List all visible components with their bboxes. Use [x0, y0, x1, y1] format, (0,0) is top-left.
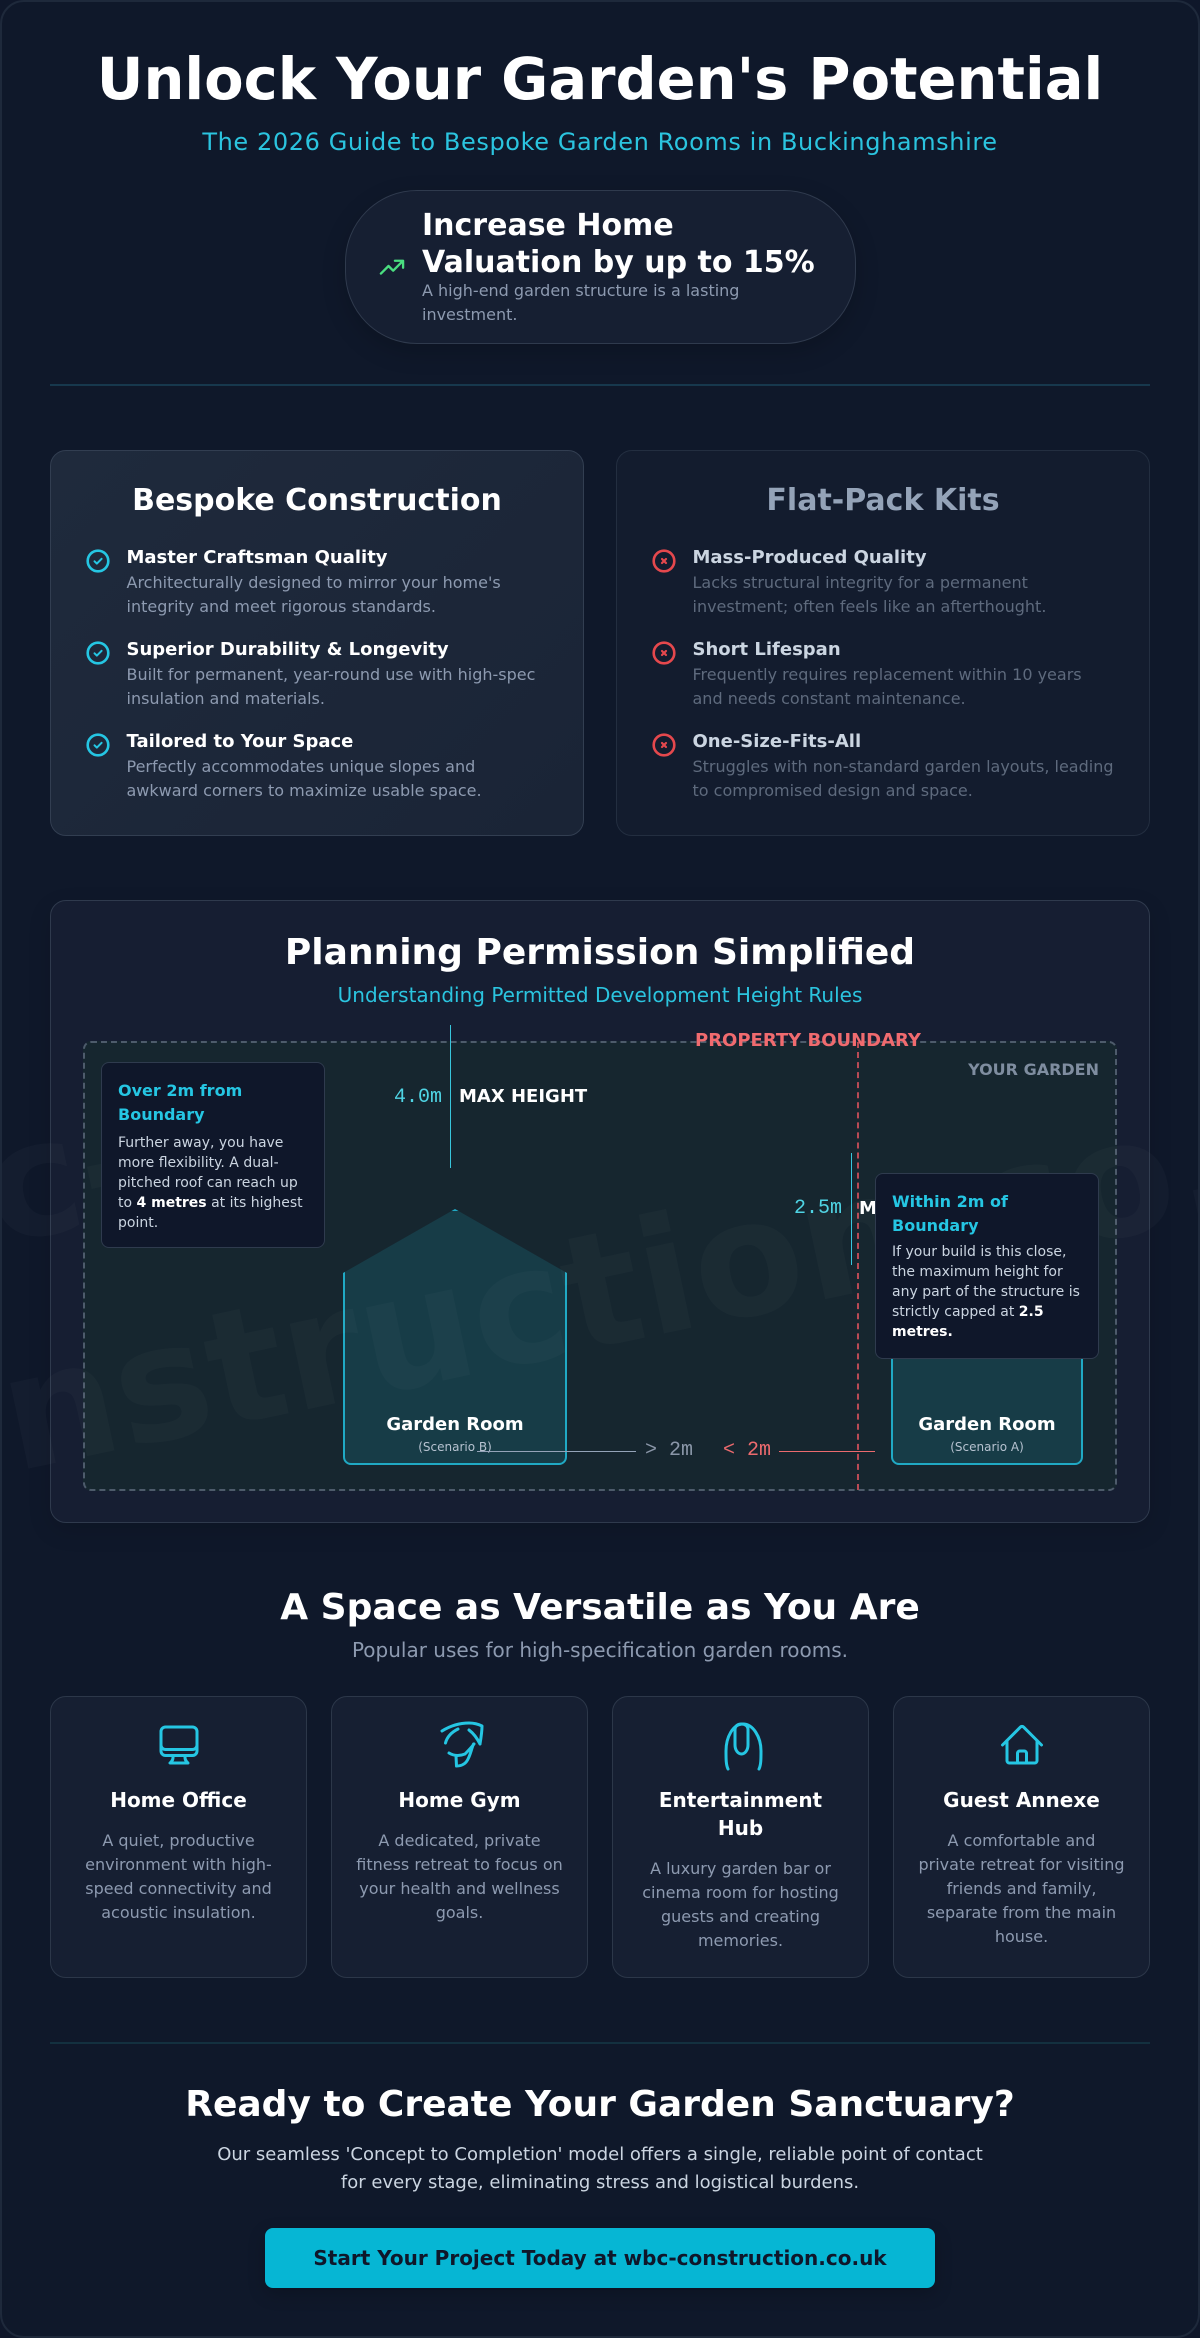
- list item: tailored: awkward corners to maximize usable space.: [126, 781, 482, 800]
- info heading: [118, 1081, 242, 1124]
- card text: [642, 1859, 839, 1950]
- room name: Garden Room: [386, 1414, 524, 1435]
- card text: your health and wellness: [359, 1879, 560, 1898]
- planning subtitle: Understanding Permitted Development Height Rules: [338, 983, 862, 1007]
- callout heading: Valuation by up to 15%: [422, 245, 815, 280]
- list item: tailored: Perfectly accommodates unique slopes and: [126, 757, 475, 776]
- flat roof body: [891, 1305, 1083, 1465]
- info text: to 4 metres at its highest: [118, 1195, 303, 1211]
- icon: mouse pointer shape: [724, 1722, 762, 1771]
- card text: cinema room for hosting: [642, 1883, 839, 1902]
- list item: durability: [86, 639, 535, 708]
- card: entertainment hub: [612, 1696, 869, 1978]
- call to action button: [265, 2228, 935, 2288]
- list item: craftsman quality: Architecturally designed to mirror your home's: [126, 573, 501, 592]
- diagram: garden plot: [83, 1041, 1117, 1491]
- height marker: 2.5m: [794, 1153, 987, 1265]
- list item: durability: Superior Durability & Longevity: [126, 639, 449, 660]
- planning heading: Planning Permission Simplified: [285, 932, 915, 973]
- list item: durability: insulation and materials.: [126, 689, 325, 708]
- info heading: Over 2m from: [118, 1081, 242, 1100]
- icon: cross circle: [652, 549, 676, 573]
- room: scenario B: [343, 1209, 567, 1465]
- icon: monitor: [160, 1726, 198, 1764]
- card text: guests and creating: [661, 1907, 820, 1926]
- list item: craftsman quality: integrity and meet rigorous standards.: [126, 597, 436, 616]
- card heading: Hub: [718, 1816, 763, 1840]
- call to action text: for every stage, eliminating stress and logistical burdens.: [341, 2172, 859, 2193]
- list item: one-size-fits-all: [652, 731, 1114, 800]
- list item: craftsman quality: [86, 547, 501, 616]
- info box: within 2m: [875, 1173, 1099, 1359]
- icon: cross circle: [652, 641, 676, 665]
- list item: one-size-fits-all: One-Size-Fits-All: [692, 731, 861, 752]
- property boundary label: PROPERTY BOUNDARY: [695, 1030, 921, 1051]
- list item: short lifespan: and needs constant maintenance.: [692, 689, 966, 708]
- card heading: [659, 1788, 822, 1840]
- icon: gym abstract: [440, 1722, 484, 1768]
- title: Unlock Your Garden's Potential: [97, 46, 1103, 113]
- list item: short lifespan: [652, 639, 1082, 708]
- card: guest annexe: [893, 1696, 1150, 1978]
- call to action text: Our seamless 'Concept to Completion' model offers a single, reliable point of contact: [217, 2144, 983, 2165]
- card text: memories.: [698, 1931, 783, 1950]
- room scenario: (Scenario A): [950, 1440, 1024, 1454]
- info heading: Boundary: [118, 1105, 205, 1124]
- list item: tailored: Tailored to Your Space: [126, 731, 353, 752]
- card text: house.: [995, 1927, 1048, 1946]
- info text: more flexibility. A dual-: [118, 1155, 279, 1171]
- info text: If your build is this close,: [892, 1244, 1066, 1260]
- card text: fitness retreat to focus on: [356, 1855, 563, 1874]
- distance rule: [779, 1451, 875, 1452]
- list item: craftsman quality: Master Craftsman Quality: [126, 547, 388, 568]
- panel: bespoke construction: [50, 450, 584, 836]
- icon: check circle: [86, 641, 110, 665]
- card heading: Guest Annexe: [943, 1788, 1100, 1812]
- info text: point.: [118, 1215, 158, 1231]
- panel: planning permission: [50, 900, 1150, 1523]
- valuation callout pill: [345, 190, 856, 344]
- room name: Garden Room: [918, 1414, 1056, 1435]
- list item: mass-produced: Mass-Produced Quality: [692, 547, 927, 568]
- card text: A quiet, productive: [102, 1831, 255, 1850]
- info text: [118, 1135, 303, 1231]
- card text: friends and family,: [947, 1879, 1096, 1898]
- panel heading: Flat-Pack Kits: [766, 483, 1000, 518]
- info text: strictly capped at 2.5: [892, 1304, 1044, 1320]
- card text: goals.: [436, 1903, 483, 1922]
- panel: flat-pack kits: [616, 450, 1150, 836]
- card text: environment with high-: [85, 1855, 272, 1874]
- callout description: A high-end garden structure is a lasting: [422, 281, 739, 300]
- info text: pitched roof can reach up: [118, 1175, 298, 1191]
- distance label: > 2m: [645, 1439, 693, 1462]
- icon: house: [1000, 1724, 1043, 1764]
- info text: [892, 1244, 1080, 1340]
- card text: A dedicated, private: [378, 1831, 541, 1850]
- icon: trending up arrow: [380, 260, 404, 275]
- height rule: [850, 1153, 852, 1265]
- card text: speed connectivity and: [85, 1879, 272, 1898]
- list item: one-size-fits-all: to compromised design and space.: [692, 781, 973, 800]
- call to action text: [217, 2144, 983, 2193]
- call to action button: Start Your Project Today at wbc-construction.co.uk: [313, 2246, 887, 2270]
- card heading: Home Office: [110, 1788, 247, 1812]
- card text: acoustic insulation.: [101, 1903, 256, 1922]
- info text: metres.: [892, 1324, 953, 1340]
- card text: A comfortable and: [948, 1831, 1095, 1850]
- subtitle: The 2026 Guide to Bespoke Garden Rooms in Buckinghamshire: [202, 128, 998, 156]
- list item: mass-produced: Lacks structural integrity for a permanent: [692, 573, 1028, 592]
- info text: the maximum height for: [892, 1264, 1063, 1280]
- callout description: [422, 281, 739, 324]
- pitched roof body: [343, 1209, 567, 1465]
- info heading: Boundary: [892, 1216, 979, 1235]
- card text: [918, 1831, 1125, 1946]
- panel heading: Bespoke Construction: [132, 483, 502, 518]
- call to action heading: Ready to Create Your Garden Sanctuary?: [185, 2084, 1015, 2125]
- card text: separate from the main: [927, 1903, 1116, 1922]
- card: home gym: [331, 1696, 588, 1978]
- list item: tailored: [86, 731, 482, 800]
- room scenario: (Scenario B): [418, 1440, 492, 1454]
- card text: A luxury garden bar or: [650, 1859, 831, 1878]
- icon: check circle: [86, 733, 110, 757]
- card heading: Home Gym: [398, 1788, 521, 1812]
- info heading: Within 2m of: [892, 1192, 1008, 1211]
- card: home office: [50, 1696, 307, 1978]
- distance rule: [477, 1451, 636, 1452]
- info text: any part of the structure is: [892, 1284, 1080, 1300]
- list item: one-size-fits-all: Struggles with non-standard garden layouts, leading: [692, 757, 1114, 776]
- card text: private retreat for visiting: [918, 1855, 1125, 1874]
- height caption: MAX HEIGHT: [459, 1086, 587, 1107]
- icon: cross circle: [652, 733, 676, 757]
- callout heading: Increase Home: [422, 208, 674, 243]
- card text: [85, 1831, 272, 1922]
- info text: Further away, you have: [118, 1135, 283, 1151]
- height rule: [450, 1025, 451, 1168]
- list item: mass-produced: [652, 547, 1046, 616]
- card heading: Entertainment: [659, 1788, 822, 1812]
- callout heading: [422, 208, 815, 280]
- height value: 4.0m: [394, 1086, 442, 1109]
- list item: short lifespan: Short Lifespan: [692, 639, 841, 660]
- section subtitle: Popular uses for high-specification garden rooms.: [352, 1638, 848, 1662]
- list item: mass-produced: investment; often feels like an afterthought.: [692, 597, 1046, 616]
- distance label: < 2m: [723, 1439, 771, 1462]
- list item: durability: Built for permanent, year-round use with high-spec: [126, 665, 535, 684]
- list item: short lifespan: Frequently requires replacement within 10 years: [692, 665, 1082, 684]
- your garden label: YOUR GARDEN: [968, 1060, 1099, 1079]
- info box: over 2m: [101, 1062, 325, 1248]
- icon: check circle: [86, 549, 110, 573]
- card text: [356, 1831, 563, 1922]
- section heading: versatile: A Space as Versatile as You Are: [280, 1587, 920, 1628]
- height value: 2.5m: [794, 1197, 842, 1220]
- height marker: 4.0m: [394, 1025, 588, 1168]
- height caption: MAX HEIGHT: [859, 1198, 987, 1219]
- callout description: investment.: [422, 305, 517, 324]
- room: scenario A: [891, 1359, 1083, 1465]
- property boundary line: [857, 1042, 859, 1490]
- info heading: [892, 1192, 1008, 1235]
